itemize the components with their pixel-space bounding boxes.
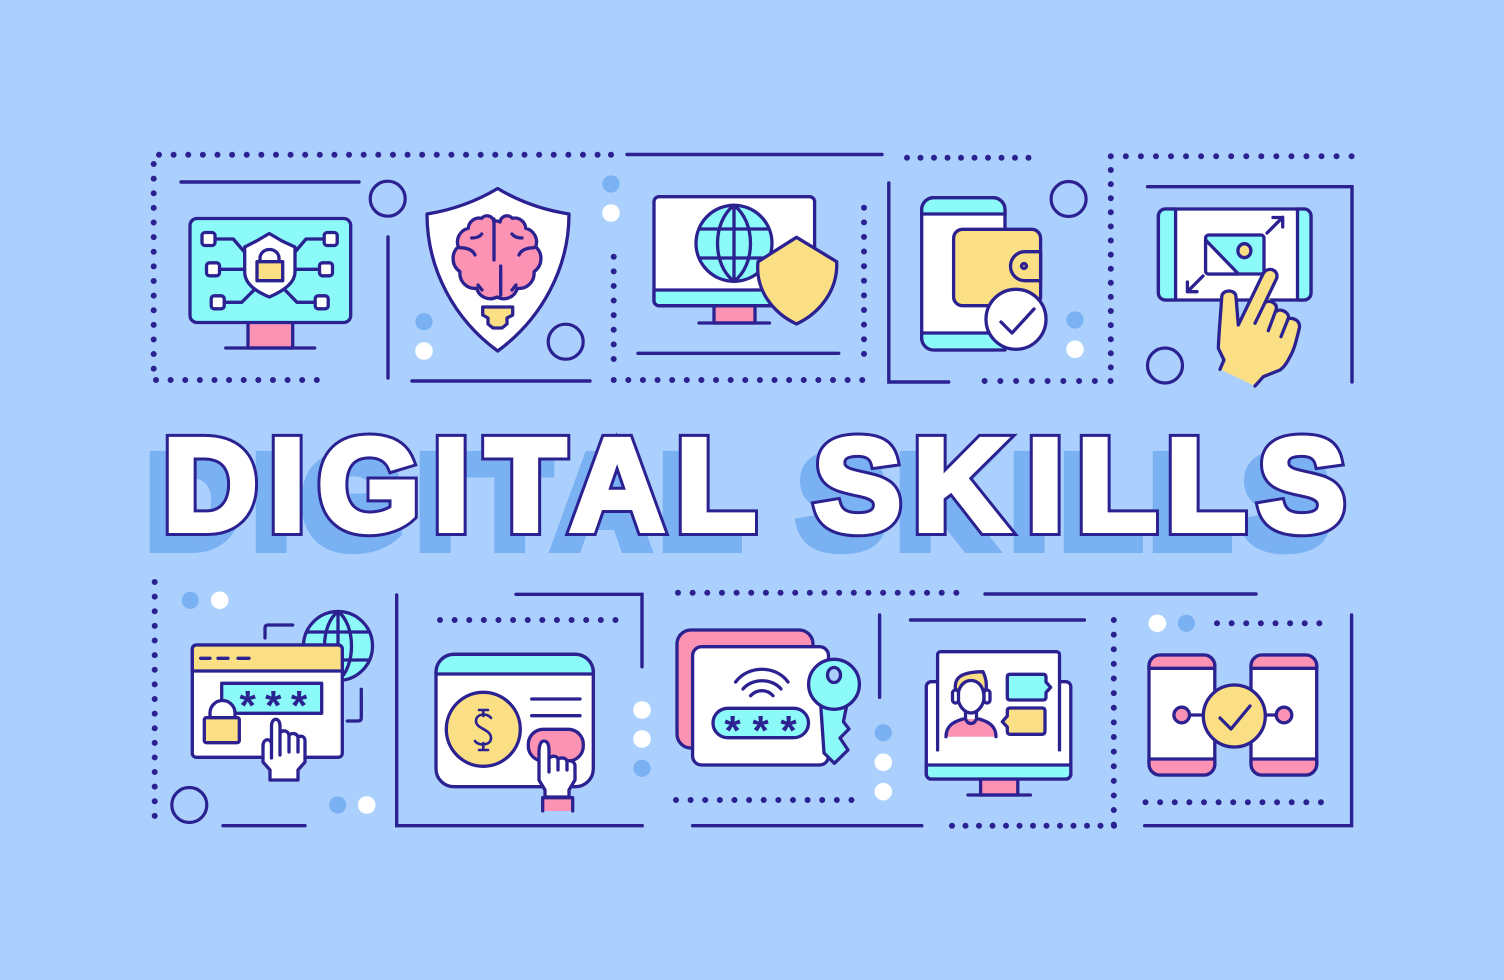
title: DIGITAL SKILLS: DIGITAL <box>163 411 756 558</box>
title: DIGITAL SKILLS <box>163 411 1345 558</box>
icon: password login with globe: * <box>240 682 257 729</box>
icon: wireless password key card <box>677 630 859 765</box>
icon: globe on monitor with shield <box>654 197 837 324</box>
icon: cyber security monitor <box>190 218 351 348</box>
icon: password login with globe <box>192 612 372 780</box>
icon: touch screen zoom gesture <box>1158 209 1311 386</box>
title shadow: SKILLS <box>798 428 1329 575</box>
decorative circles and dots <box>172 175 1195 822</box>
title shadow: DIGITAL <box>147 428 740 575</box>
icon: password login with globe: * <box>265 682 282 729</box>
icon: digital wallet on phone <box>922 198 1046 350</box>
title: DIGITAL SKILLS: SKILLS <box>814 411 1345 558</box>
icon: video support on monitor <box>926 652 1071 795</box>
title shadow <box>147 428 1329 575</box>
icon: wireless password key card: * <box>752 707 769 754</box>
icon: wireless password key card: * <box>724 707 741 754</box>
icon: connected phones with check <box>1149 655 1317 775</box>
title: DIGITAL SKILLS: DIGITAL <box>163 411 756 558</box>
icon: brain in shield <box>427 188 569 351</box>
icon: online payment window <box>436 654 593 811</box>
dotted and solid frame lines <box>154 152 1353 827</box>
icon: wireless password key card: * <box>780 707 797 754</box>
icon: password login with globe: * <box>291 682 308 729</box>
title: DIGITAL SKILLS: SKILLS <box>814 411 1345 558</box>
